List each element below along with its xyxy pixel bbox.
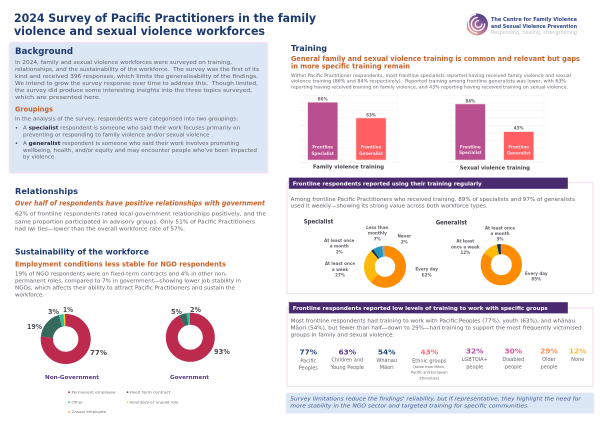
donut chart: specialist: At least once	[325, 261, 355, 266]
donut chart: specialist: 62%	[422, 272, 432, 277]
stat: Pacific Peoples 77%: Pacific	[300, 358, 316, 364]
subheading: training: General family and sexual violence training is common and relevant but gaps	[291, 55, 580, 63]
stat: Older people 29%	[540, 346, 558, 370]
heading: sustainability: Sustainability of the workforce	[15, 246, 149, 256]
stat: Older people 29%: Older	[542, 357, 557, 363]
subheading: training: in more specific training remain	[291, 62, 410, 70]
donut chart: specialist: 27%	[335, 273, 345, 278]
text block: groupings: In the analysis of the survey, respondents were categorised into two groupings:	[15, 116, 238, 122]
bar: specialist 84%: Frontline	[460, 144, 481, 149]
stat: Children and Young People 63%: Children and	[331, 358, 363, 364]
stat: Ethnic groups 43%: (aside from Māori,	[413, 365, 445, 369]
legend: employment type: Other	[72, 400, 84, 404]
bar: specialist 86%	[308, 96, 338, 160]
text block: relationships: 62% of frontline respondents rated local government relationships positively, and the	[15, 212, 266, 218]
text block: training: reporting having received training on family violence, and 43% reporting having received training on sexual violence.	[291, 84, 568, 90]
section: sustainability of the workforce	[15, 246, 241, 298]
donut chart: specialist: Every day	[415, 266, 438, 271]
text block: background: In 2024, family and sexual violence workforces were surveyed on training,	[15, 60, 232, 66]
donut chart: generalist: a month	[490, 231, 510, 236]
callout: survey limitations: more stability in the NGO sector and targeted training for specific communities.	[290, 404, 529, 410]
text block: specific groups	[291, 319, 582, 338]
chart title: family violence: Family violence training	[313, 165, 384, 171]
donut chart: government	[170, 306, 230, 381]
stat: Ethnic groups 43%: 43%	[420, 347, 439, 356]
text block: training	[291, 73, 571, 90]
donut chart: generalist	[436, 220, 548, 282]
text block: background: which are presented here.	[15, 95, 101, 101]
donut chart: non-government: 19%	[27, 323, 42, 331]
donut chart: specialist	[304, 219, 438, 282]
callout: survey limitations	[286, 393, 594, 413]
donut chart: non-government	[27, 306, 107, 381]
donut chart: generalist: 3%	[497, 237, 503, 242]
donut chart: generalist: Generalist	[436, 220, 467, 226]
donut chart: generalist: At least once	[485, 225, 515, 230]
logo text: The Centre for Family Violence	[491, 17, 578, 23]
stat: Ethnic groups 43%: Ethnic groups	[412, 358, 447, 364]
donut chart: non-government: 77%	[90, 349, 107, 357]
subheading: relationships: Over half of respondents have positive relationships with government	[15, 200, 266, 208]
text block: sustainability	[15, 272, 241, 298]
text block: sustainability: NGOs, which affects their ability to attract Pacific Practitioners and sustain the	[15, 286, 235, 292]
legend: employment type: Fixed Term contract	[130, 390, 171, 394]
text block: training: Within Pacific Practitioner respondents, most frontline specialists reported having received family violence and sexual	[291, 73, 571, 79]
text block: training use: used it weekly—showing its strong value across both workforce types.	[291, 203, 488, 209]
text block: sustainability: 19% of NGO respondents were on fixed-term contracts and 4% in other non-	[15, 272, 227, 278]
text block: specific groups: Most frontline respondents had training to work with Pacific Peoples (77%), youth (63%), and whānau	[291, 319, 575, 325]
text block: background	[15, 60, 259, 101]
stat: LGBTQIA+ people 32%: LGBTQIA+	[462, 357, 488, 363]
text block: background: kind and received 396 responses, which limits the generalisability of the findings.	[15, 74, 258, 80]
stat: None 12%	[569, 346, 587, 363]
text block: relationships: same proportion participated in advisory groups. Only 51% of Pacific Practitioners	[15, 219, 255, 225]
text block: training: violence training (86% and 84% respectively). Reported training among frontline generalists was lower, with 63%	[291, 79, 567, 85]
donut chart: specialist: a week	[332, 267, 348, 272]
bar: specialist 86%: Specialist	[311, 151, 334, 156]
heading: background: Background	[15, 47, 73, 57]
panel: specific groups training	[287, 302, 593, 386]
bar: generalist 43%: Frontline	[508, 145, 529, 150]
donut chart: specialist: a month	[330, 244, 349, 249]
bar chart: sexual violence training	[446, 90, 544, 172]
text block: specific groups: groups in family and sexual violence.	[291, 332, 395, 338]
donut chart: generalist: 85%	[531, 277, 541, 282]
text block: sustainability: permanent roles, compared to 7% in government—showing lower job stability in	[15, 279, 241, 285]
bar: specialist 86%: 86%	[318, 96, 328, 101]
text block: background: relationships, and the sustainability of the workforce. The survey was the first of its	[15, 67, 259, 73]
chart title: non-government: Non-Government	[45, 375, 99, 381]
stat: None 12%: 12%	[569, 346, 587, 355]
text block: specific groups: Māori (54%), but fewer than half—down to 29%—had training to support the most frequently victimised	[291, 326, 582, 332]
donut chart: specialist: Less than	[366, 225, 389, 230]
title: violence and sexual violence workforces	[14, 24, 265, 38]
bar: specialist 84%	[455, 98, 485, 160]
section: relationships	[15, 186, 266, 233]
panel: training use	[287, 178, 593, 294]
donut chart: generalist: Every day	[525, 271, 548, 276]
stat: Whānau Māori 54%: 54%	[378, 348, 396, 357]
bar: generalist 63%: Generalist	[359, 151, 383, 156]
donut chart: generalist: once a week	[451, 244, 480, 249]
heading: relationships: Relationships	[15, 186, 78, 196]
text block: relationships: had iwi ties—lower than the overall workforce rate of 57%.	[15, 227, 185, 233]
donut chart: specialist: 2%	[401, 239, 408, 244]
stat: LGBTQIA+ people 32%: 32%	[466, 346, 484, 355]
heading: groupings: Groupings	[15, 106, 53, 114]
legend: employment type: Permanent employee	[72, 390, 116, 394]
stat: Disabled people 30%: people	[505, 364, 522, 370]
text block: sustainability: workforce.	[15, 292, 44, 298]
bar: generalist 63%: 63%	[366, 112, 376, 117]
stat: Pacific Peoples 77%	[299, 348, 318, 371]
donut chart: non-government: 1%	[63, 306, 73, 314]
stat: LGBTQIA+ people 32%	[462, 346, 488, 370]
stat: Children and Young People 63%: Young People	[330, 365, 364, 371]
stat: Ethnic groups 43%: Ethnicities)	[420, 376, 440, 380]
donut chart: government: 5%	[171, 308, 182, 316]
banner: training use	[289, 178, 568, 189]
stat: Disabled people 30%: 30%	[504, 346, 523, 355]
banner: specific groups: Frontline respondents reported low levels of training to work with specific groups	[293, 306, 548, 312]
stat: Disabled people 30%	[502, 346, 524, 370]
donut chart: specialist: 2%	[336, 249, 343, 254]
title	[14, 11, 316, 38]
heading: training: Training	[291, 43, 327, 53]
legend: employment type	[68, 390, 179, 414]
callout: survey limitations: Survey limitations reduce the findings' reliability, but if representative, they highlight the need for	[290, 397, 581, 403]
bar: generalist 43%: 43%	[514, 126, 524, 131]
banner: training use: Frontline respondents reported using their training regularly	[293, 181, 482, 187]
bar: generalist 43%: Generalist	[507, 150, 531, 155]
bar: generalist 63%: Frontline	[361, 144, 382, 150]
donut chart: government: 2%	[190, 306, 201, 314]
text block: relationships	[15, 212, 266, 233]
legend: employment type: Voluntary or unpaid role	[130, 400, 179, 404]
text block: groupings: A specialist respondent is someone who said their work focuses primarily on	[23, 126, 240, 132]
donut chart: specialist: At least once	[324, 238, 355, 243]
donut chart: government: 93%	[214, 348, 230, 356]
text block: background: We intend to grow the survey response over time to address this. Though limited,	[15, 81, 258, 87]
donut chart: non-government: 3%	[48, 308, 59, 316]
text block: training use	[291, 197, 575, 209]
donut chart: specialist: 7%	[374, 236, 381, 241]
bar: generalist 63%	[356, 112, 386, 160]
text block: training use: Among frontline Pacific Practitioners who received training, 89% of specialists and 97% of generalists	[291, 197, 575, 203]
stat: Whānau Māori 54%: Whānau	[376, 358, 397, 364]
donut chart: generalist: At least	[456, 239, 474, 244]
subheading: employment conditions: Employment conditions less stable for NGO respondents	[15, 261, 226, 269]
text block: groupings	[15, 116, 257, 161]
bar: generalist 43%	[504, 126, 534, 160]
text block: groupings: preventing or responding to family violence and/or sexual violence .	[23, 132, 213, 138]
logo: centre for family violence prevention: Responding, healing, strengthening	[491, 30, 577, 36]
stat: Ethnic groups 43%: Pacific and European	[411, 370, 448, 374]
stat: None 12%: None	[571, 357, 584, 363]
stat: Older people 29%: 29%	[540, 346, 558, 355]
bar: specialist 84%: Specialist	[459, 150, 482, 155]
stat: Children and Young People 63%	[330, 348, 364, 371]
text block: groupings: wellbeing, health, and/or equity and may encounter people who've been impacted	[23, 148, 257, 154]
stat: Pacific Peoples 77%: 77%	[299, 348, 318, 357]
text block: groupings: A generalist respondent is someone who said their work involves promoting	[23, 141, 239, 147]
stat: Pacific Peoples 77%: Peoples	[299, 365, 318, 371]
logo: centre for family violence prevention: and Sexual Violence Prevention	[491, 24, 577, 30]
stat: LGBTQIA+ people 32%: people	[466, 364, 483, 370]
stat: Whānau Māori 54%: Māori	[380, 365, 394, 371]
bar chart: family violence training	[299, 90, 397, 171]
stat: Disabled people 30%: Disabled	[502, 357, 524, 363]
panel: background and groupings	[10, 42, 268, 173]
donut chart: generalist: 12%	[460, 250, 470, 255]
donut chart: specialist: Never	[397, 233, 411, 238]
icon: swirl	[466, 14, 488, 36]
logo: centre for family violence prevention	[466, 14, 578, 36]
section: training	[291, 43, 580, 90]
text block: background: the survey did produce some interesting insights into the three topics surveyed,	[15, 88, 252, 94]
subheading: training	[291, 55, 580, 70]
stat: Whānau Māori 54%	[376, 348, 397, 371]
bar: specialist 86%: Frontline	[312, 144, 333, 149]
title: 2024 Survey of Pacific Practitioners in the family	[14, 11, 316, 25]
legend: employment type: Casual employee	[72, 410, 106, 414]
chart title: government: Government	[170, 375, 209, 381]
stat: Older people 29%: people	[541, 364, 557, 370]
stat: Ethnic groups 43%	[411, 347, 448, 380]
donut chart: specialist: monthly	[368, 231, 387, 236]
text block: groupings: by violence.	[23, 155, 56, 161]
stat: Children and Young People 63%: 63%	[338, 348, 357, 357]
banner: specific groups	[289, 302, 568, 313]
donut chart: specialist: Specialist	[304, 219, 334, 225]
bar: specialist 84%: 84%	[465, 98, 475, 103]
chart title: sexual violence: Sexual violence training	[460, 166, 530, 172]
